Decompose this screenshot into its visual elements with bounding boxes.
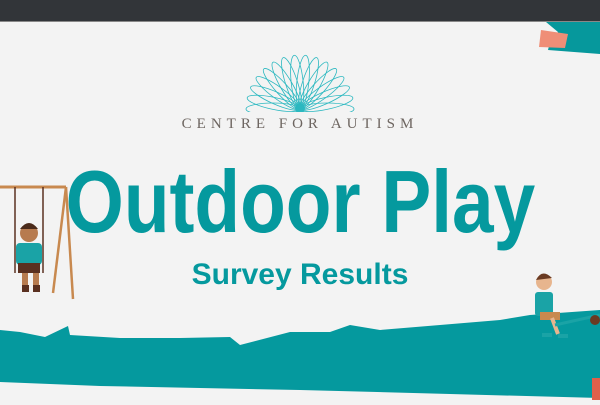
illustration: child on seesaw — [535, 274, 600, 338]
title: Outdoor Play — [66, 152, 535, 251]
decoration: top right shapes — [539, 22, 600, 54]
teal brush band — [0, 310, 600, 398]
top bar — [0, 0, 600, 22]
decoration: bottom right red corner — [592, 378, 600, 400]
logo text: CENTRE FOR AUTISM — [182, 116, 418, 132]
logo: fan — [246, 54, 354, 112]
illustration: swing with child — [0, 186, 74, 300]
subtitle: Survey Results — [192, 258, 408, 291]
